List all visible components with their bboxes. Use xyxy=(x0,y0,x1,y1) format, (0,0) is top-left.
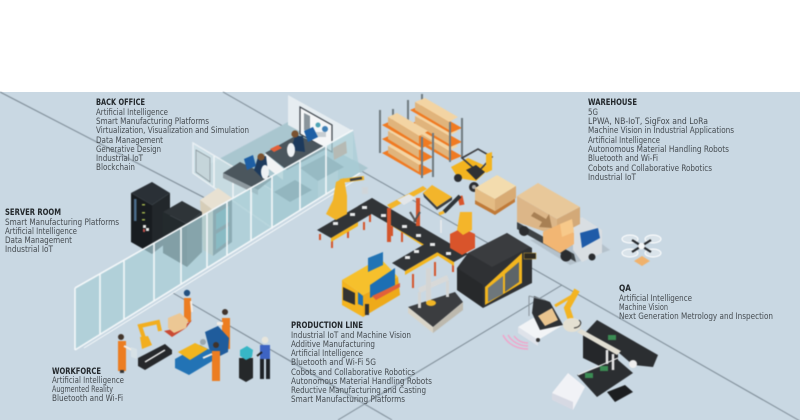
black pillar with teal model xyxy=(239,346,253,382)
text: warehouse: LPWA, NB-IoT, SigFox and LoRa xyxy=(588,116,708,126)
text: back office: BACK OFFICE xyxy=(96,97,145,107)
cargo parcels xyxy=(543,219,574,253)
text: warehouse: WAREHOUSE xyxy=(588,97,637,107)
wheels xyxy=(519,226,596,262)
text: production line xyxy=(291,320,432,404)
tall server rack xyxy=(131,182,170,254)
text: server room xyxy=(5,207,119,254)
text: warehouse: Bluetooth and Wi-Fi xyxy=(588,153,658,163)
production line xyxy=(317,178,536,333)
text: workforce: Bluetooth and Wi-Fi xyxy=(52,393,123,403)
gantry pick and place xyxy=(387,186,427,242)
drone rotors xyxy=(622,235,661,257)
text: back office: Generative Design xyxy=(96,144,161,154)
shelf boxes xyxy=(333,141,347,160)
text: warehouse: Autonomous Material Handling Robots xyxy=(588,144,729,154)
text: QA: Next Generation Metrology and Inspection xyxy=(619,311,773,321)
glass panes xyxy=(75,130,360,350)
truck cab xyxy=(573,217,602,262)
black conveyor xyxy=(138,344,172,370)
text: production line: Cobots and Collaborative Robotics xyxy=(291,367,415,377)
upper inspection conveyor xyxy=(577,320,658,375)
yellow control machine xyxy=(342,252,400,317)
pallet of boxes xyxy=(475,175,516,215)
text: server room: SERVER ROOM xyxy=(5,207,61,217)
text: warehouse: Machine Vision in Industrial Applications xyxy=(588,125,734,135)
text: production line: PRODUCTION LINE xyxy=(291,320,363,330)
white output machine xyxy=(552,373,585,410)
floor background xyxy=(0,92,800,420)
text: back office: Smart Manufacturing Platforms xyxy=(96,116,209,126)
conveyor legs xyxy=(320,213,453,288)
orange robot xyxy=(439,196,475,255)
text: workforce: WORKFORCE xyxy=(52,366,101,376)
text: production line: Artificial Intelligence xyxy=(291,348,363,358)
wireless signal arcs xyxy=(503,335,528,349)
QA area xyxy=(503,290,658,410)
parts on belt xyxy=(333,206,451,259)
text: server room: Smart Manufacturing Platforms xyxy=(5,217,119,227)
worker at lathe xyxy=(217,309,230,349)
floor guide lines xyxy=(0,92,800,420)
workforce group xyxy=(118,290,270,382)
blue machine xyxy=(175,326,229,375)
worker at rear desk xyxy=(287,127,318,157)
back wall xyxy=(288,95,353,160)
text: back office: Data Management xyxy=(96,135,164,145)
chassis xyxy=(517,222,576,262)
text: back office: Blockchain xyxy=(96,162,135,172)
wall screen xyxy=(300,107,332,152)
worker with hand cart xyxy=(184,290,192,327)
screen charts xyxy=(304,113,328,137)
lower inspection conveyor xyxy=(577,350,633,402)
truck shadow xyxy=(530,235,610,265)
foreground worker xyxy=(203,342,220,381)
yellow robot arm xyxy=(326,178,368,220)
side wall panel xyxy=(193,143,272,228)
autonomous cart xyxy=(518,296,563,346)
room floor xyxy=(193,122,368,228)
worker at front desk xyxy=(244,153,269,179)
rear shelf xyxy=(408,94,462,162)
coordinate measuring machine xyxy=(408,268,463,333)
back office room xyxy=(193,95,368,228)
text: back office: Artificial Intelligence xyxy=(96,107,168,117)
second server rack xyxy=(163,201,202,267)
text: warehouse: Cobots and Collaborative Robotics xyxy=(588,163,712,173)
robot arm xyxy=(140,322,160,349)
text: server room: Industrial IoT xyxy=(5,244,54,254)
white cabinet xyxy=(200,188,232,256)
text: production line: Reductive Manufacturing and Casting xyxy=(291,385,426,395)
conveyor belts xyxy=(317,198,468,275)
text: production line: Bluetooth and Wi-Fi 5G xyxy=(291,357,376,367)
server room xyxy=(131,182,232,267)
text: warehouse: Artificial Intelligence xyxy=(588,135,660,145)
text: back office: Virtualization, Visualization and Simulation xyxy=(96,125,249,135)
text: QA xyxy=(619,283,773,321)
text: warehouse xyxy=(588,97,734,182)
text: back office xyxy=(96,97,249,172)
text: production line: Autonomous Material Handling Robots xyxy=(291,376,432,386)
empty desks xyxy=(274,155,344,202)
desk front xyxy=(223,162,273,195)
delivery truck xyxy=(517,183,610,265)
text: QA: Machine Vision xyxy=(619,302,668,312)
text: workforce: Augmented Reality xyxy=(52,384,113,394)
text: warehouse: 5G xyxy=(588,107,598,117)
rack lights xyxy=(142,204,145,220)
AGV yellow platform xyxy=(423,185,452,210)
text: back office: Industrial IoT xyxy=(96,153,144,163)
desk rear xyxy=(265,135,328,180)
glass wall xyxy=(75,130,362,350)
hand cart with boxes xyxy=(164,313,192,337)
forklift xyxy=(451,149,492,192)
text: QA: Artificial Intelligence xyxy=(619,293,692,303)
text: QA: QA xyxy=(619,283,631,293)
inspector xyxy=(257,337,270,379)
text: production line: Additive Manufacturing xyxy=(291,339,375,349)
drone xyxy=(622,235,661,266)
worker with tablet xyxy=(118,334,137,373)
text: workforce xyxy=(52,366,124,403)
cargo box xyxy=(517,183,580,236)
drone body xyxy=(632,240,651,266)
glass framing xyxy=(75,130,362,350)
rack status tags xyxy=(134,199,149,232)
text: workforce: Artificial Intelligence xyxy=(52,375,124,385)
front shelf xyxy=(380,109,433,178)
text: server room: Data Management xyxy=(5,235,73,245)
warehouse shelves xyxy=(380,94,462,178)
text: warehouse: Industrial IoT xyxy=(588,172,637,182)
yellow inspection arm xyxy=(555,290,581,332)
text: production line: Industrial IoT and Machine Vision xyxy=(291,330,411,340)
text: production line: Smart Manufacturing Platforms xyxy=(291,394,405,404)
black moulding machine xyxy=(457,233,536,308)
text: server room: Artificial Intelligence xyxy=(5,226,77,236)
